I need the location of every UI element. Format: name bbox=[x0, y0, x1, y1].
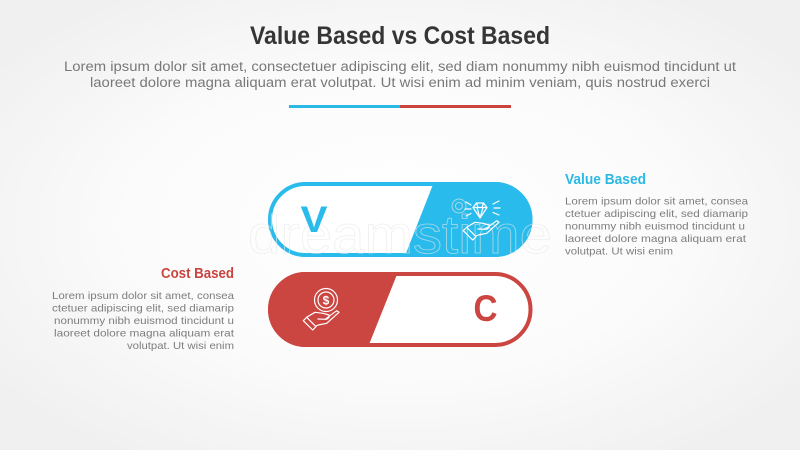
heading: value based: Value Based bbox=[565, 172, 646, 188]
body: value based: nonummy nibh euismod tincidunt u bbox=[565, 220, 745, 232]
body: cost based: volutpat. Ut wisi enim bbox=[127, 340, 234, 352]
title divider: two-colour rule bbox=[289, 105, 511, 108]
panel: value based pill bbox=[270, 182, 532, 257]
subtitle text: Lorem ipsum dolor sit amet, consectetuer adipiscing elit, sed diam nonummy nibh euismod tincidunt ut bbox=[64, 59, 736, 74]
body: value based: ctetuer adipiscing elit, sed diamarip bbox=[565, 208, 748, 220]
body: cost based bbox=[52, 290, 234, 352]
body: value based: volutpat. Ut wisi enim bbox=[565, 246, 673, 258]
body: cost based: nonummy nibh euismod tincidunt u bbox=[54, 315, 234, 327]
subtitle text bbox=[64, 59, 736, 90]
red filled section bbox=[268, 272, 398, 347]
text block: cost based bbox=[52, 266, 234, 352]
icon: diamond in hand bbox=[463, 201, 500, 240]
body: value based: Lorem ipsum dolor sit amet, consea bbox=[565, 196, 748, 208]
icon: coin in hand: $ bbox=[323, 294, 330, 308]
subtitle text: laoreet dolore magna aliquam erat volutpat. Ut wisi enim ad minim veniam, quis nostrud exerci bbox=[90, 75, 710, 90]
panel: cost based pill bbox=[268, 272, 530, 347]
body: value based: laoreet dolore magna aliquam erat bbox=[565, 233, 746, 245]
body: cost based: Lorem ipsum dolor sit amet, consea bbox=[52, 290, 234, 302]
letter V: V bbox=[300, 199, 328, 240]
text block: value based bbox=[565, 172, 748, 258]
watermark: dreamstime bbox=[248, 205, 552, 265]
body: value based bbox=[565, 196, 748, 258]
letter C: C bbox=[474, 288, 498, 329]
body: cost based: laoreet dolore magna aliquam erat bbox=[54, 328, 234, 340]
heading: cost based: Cost Based bbox=[161, 266, 234, 282]
title: Value Based vs Cost Based bbox=[250, 22, 550, 50]
blue filled section bbox=[404, 182, 532, 257]
body: cost based: ctetuer adipiscing elit, sed diamarip bbox=[52, 302, 234, 314]
icon: coin in hand bbox=[303, 288, 339, 330]
